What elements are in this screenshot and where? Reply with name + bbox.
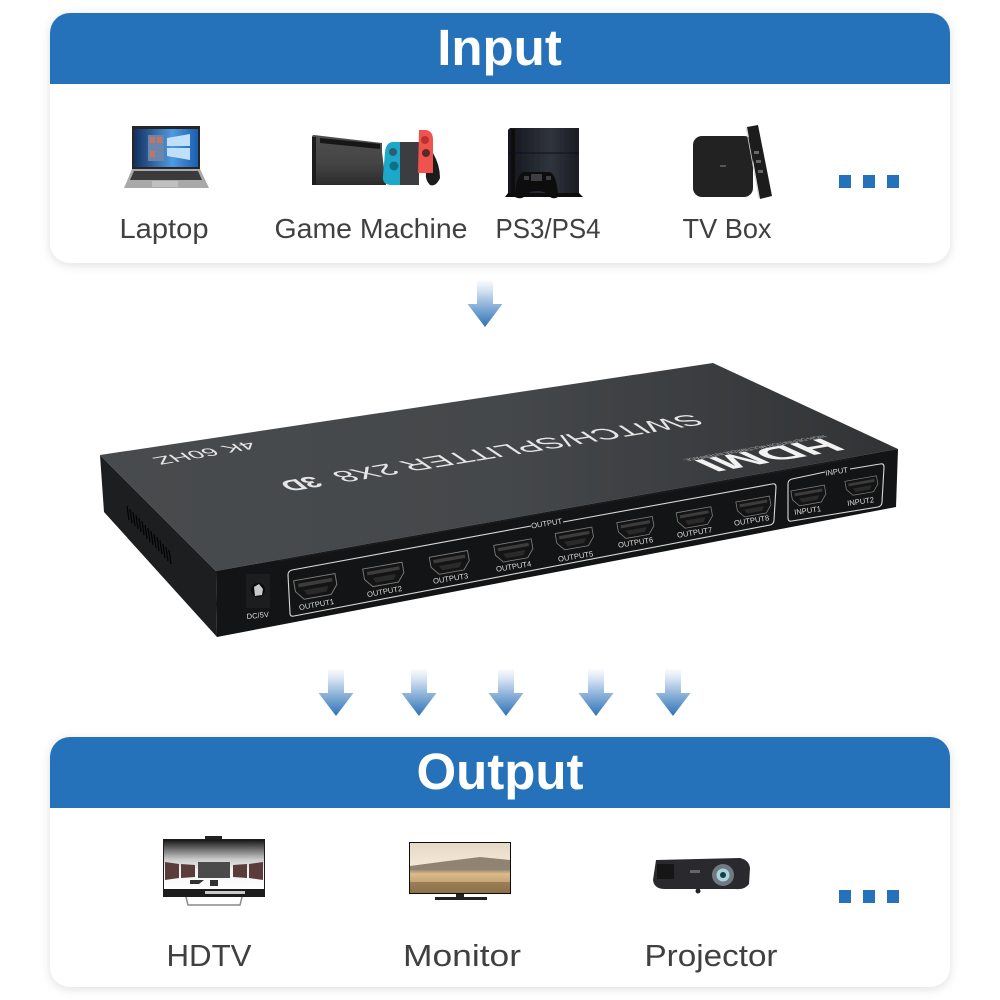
panel: output bbox=[50, 737, 950, 987]
label: OUTPUT: OUTPUT bbox=[530, 517, 563, 530]
icon: game machine bbox=[312, 130, 440, 185]
input header bar bbox=[50, 13, 950, 84]
icon: more dots bbox=[839, 890, 899, 903]
label: Game Machine: Game Machine bbox=[274, 213, 468, 244]
port: input 1: INPUT1 bbox=[794, 504, 822, 517]
top print: HDMI tagline: HIGH-DEFINITION MULTIMEDIA INTERFACE bbox=[681, 434, 828, 461]
icon: HDTV bbox=[163, 836, 265, 905]
input ports frame bbox=[788, 464, 884, 521]
top print: HDMI logo: HDMI bbox=[683, 434, 856, 475]
icon: PS4 console bbox=[505, 128, 583, 198]
port: input 1 bbox=[791, 485, 827, 517]
label: TV Box: TV Box bbox=[682, 213, 772, 244]
output header bar bbox=[50, 737, 950, 808]
top print: 4K 60HZ: 4K 60HZ bbox=[149, 439, 261, 467]
port: output 6: OUTPUT6 bbox=[617, 535, 654, 550]
icon: laptop bbox=[124, 126, 209, 188]
label: HDTV: HDTV bbox=[166, 938, 252, 973]
panel: input bbox=[50, 13, 950, 263]
port: output 8: OUTPUT8 bbox=[733, 513, 770, 528]
output ports frame bbox=[288, 484, 776, 616]
port: output 7: OUTPUT7 bbox=[676, 525, 713, 540]
heading: Input: Input bbox=[437, 19, 562, 76]
port: input 2 bbox=[845, 476, 879, 508]
top print: 3D: 3D bbox=[273, 473, 328, 494]
device left side bbox=[100, 455, 217, 637]
port: output 1: OUTPUT1 bbox=[298, 597, 335, 612]
device: HDMI switch splitter bbox=[100, 363, 898, 637]
port: output 5 bbox=[555, 527, 595, 564]
label: Projector: Projector bbox=[644, 938, 778, 973]
device top face bbox=[100, 363, 898, 571]
top print: switch splitter: SWITCH/SPLITTER 2X8 bbox=[325, 411, 711, 485]
DC power jack bbox=[246, 574, 270, 621]
port: input 2: INPUT2 bbox=[847, 495, 875, 508]
device front face bbox=[216, 449, 898, 637]
port: output 4 bbox=[494, 539, 534, 574]
port: output 8 bbox=[733, 496, 772, 528]
side vents bbox=[127, 506, 171, 564]
port: output 6 bbox=[617, 516, 655, 550]
port: output 3: OUTPUT3 bbox=[432, 571, 469, 586]
icon: monitor bbox=[409, 842, 511, 900]
label: PS3/PS4: PS3/PS4 bbox=[496, 213, 600, 244]
port: output 1 bbox=[294, 574, 338, 612]
arrow: input to device bbox=[468, 279, 502, 327]
port: output 5: OUTPUT5 bbox=[557, 549, 594, 564]
port: output 2 bbox=[363, 562, 405, 599]
label: Monitor: Monitor bbox=[403, 938, 521, 973]
port: output 4: OUTPUT4 bbox=[495, 559, 532, 574]
icon: projector bbox=[653, 858, 750, 894]
arrows: device to output bbox=[318, 668, 690, 716]
port: output 3 bbox=[429, 551, 471, 586]
heading: Output: Output bbox=[416, 743, 584, 800]
label: Laptop: Laptop bbox=[120, 213, 208, 244]
port: output 7 bbox=[676, 507, 714, 540]
icon: TV box bbox=[693, 125, 772, 199]
DC power jack: DC/5V bbox=[246, 610, 270, 621]
icon: more dots bbox=[839, 175, 899, 188]
label: INPUT: INPUT bbox=[825, 465, 849, 478]
port: output 2: OUTPUT2 bbox=[366, 584, 403, 599]
